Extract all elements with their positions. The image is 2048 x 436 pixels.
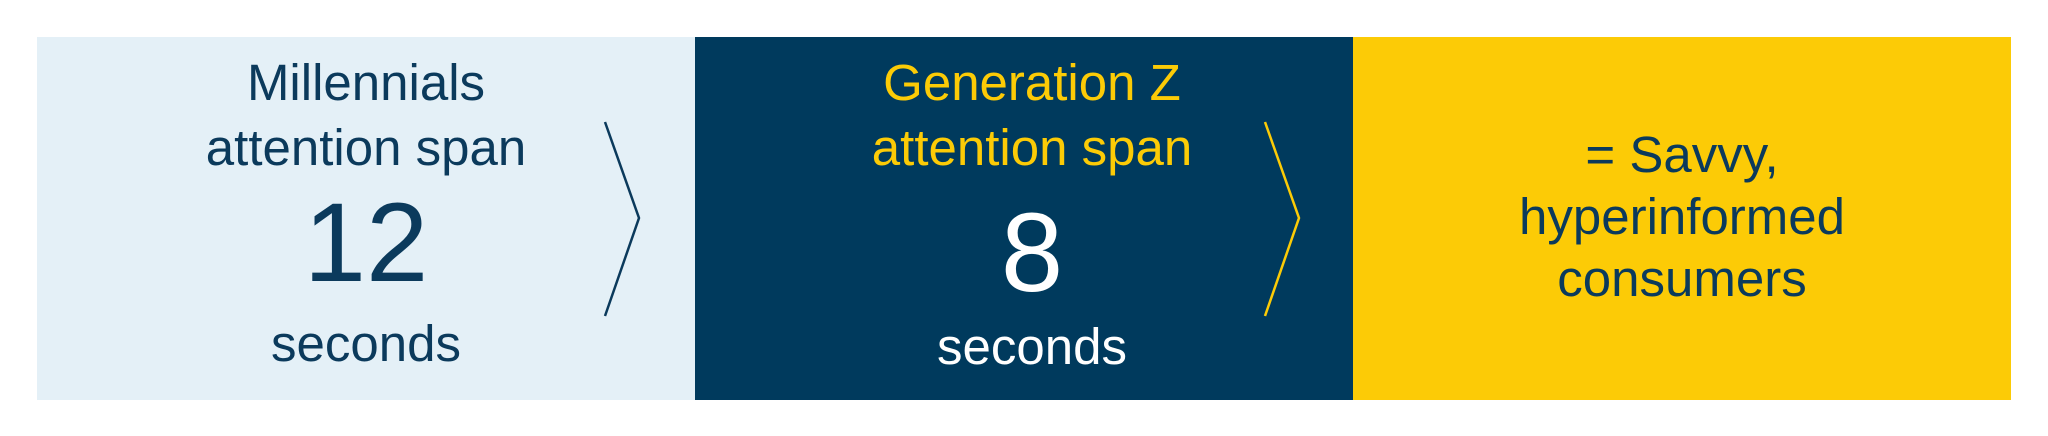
arrow: chevron — [1264, 122, 1300, 316]
heading: millennials attention span: Millennials — [247, 54, 485, 111]
heading: generation z attention span — [872, 54, 1192, 176]
text: savvy hyperinformed consumers — [1519, 126, 1845, 307]
heading: millennials attention span — [206, 54, 526, 176]
panel: millennials — [37, 37, 695, 400]
panel: result — [1353, 37, 2011, 400]
number: 12: 12 — [304, 180, 428, 305]
label: seconds: seconds — [937, 318, 1127, 375]
heading: millennials attention span: attention span — [206, 119, 526, 176]
panel: generation z — [695, 37, 1353, 400]
text: savvy hyperinformed consumers: hyperinformed — [1519, 188, 1845, 245]
arrow: chevron — [604, 122, 640, 316]
heading: generation z attention span: Generation Z — [883, 54, 1181, 111]
text: savvy hyperinformed consumers: consumers — [1557, 250, 1807, 307]
label: seconds: seconds — [271, 315, 461, 372]
number: 8: 8 — [1001, 190, 1063, 315]
text: savvy hyperinformed consumers: = Savvy, — [1585, 126, 1779, 183]
heading: generation z attention span: attention span — [872, 119, 1192, 176]
